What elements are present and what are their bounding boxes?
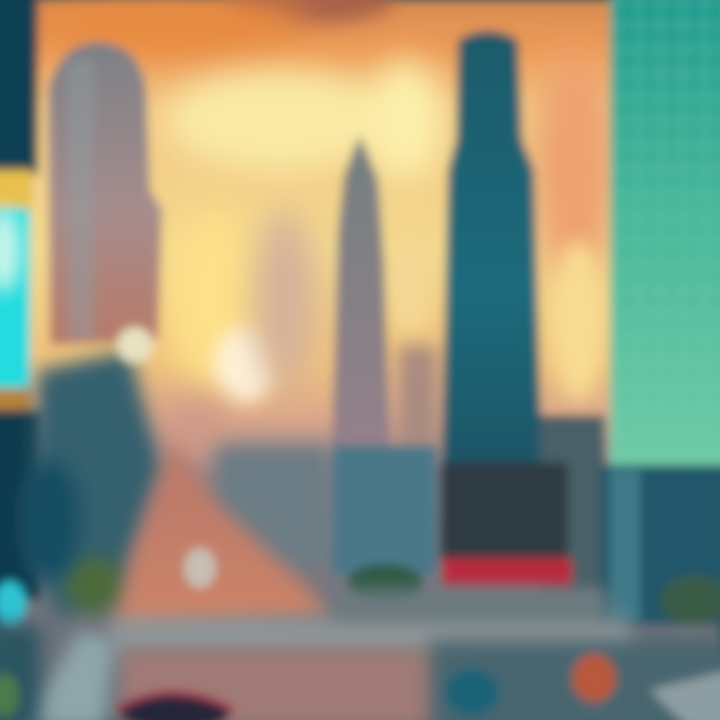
building: left edge with glowing sign	[0, 0, 40, 625]
cars in the foreground	[115, 654, 720, 720]
building: rose-grey tower left	[48, 42, 162, 345]
trees and buildings along left street	[20, 327, 162, 620]
foreground intersection	[0, 590, 720, 720]
building: green glass tower right	[610, 0, 720, 470]
building: tall dark teal tower	[442, 31, 542, 465]
road perspective	[115, 440, 335, 630]
building: central spire	[332, 135, 390, 445]
low buildings in the midground	[215, 415, 605, 600]
building: right base block	[600, 465, 720, 625]
